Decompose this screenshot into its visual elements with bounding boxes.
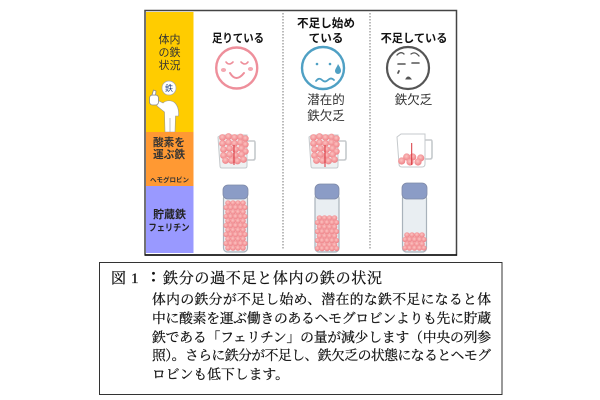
jar: low, short — [402, 183, 427, 252]
mug: full, sufficient — [218, 133, 255, 168]
heading: starting to be short: ている — [309, 32, 343, 45]
row header: oxygen carrying iron: 運ぶ鉄 — [153, 148, 185, 161]
row header: stored iron: 貯蔵鉄 — [153, 207, 186, 221]
column 3: short — [381, 32, 447, 107]
icon: smiling face — [216, 48, 257, 88]
row header: iron status in the body — [146, 12, 194, 132]
row header: oxygen carrying iron — [146, 132, 194, 186]
caption body: 体内の鉄分が不足し始め、潜在的な鉄不足になると体 — [152, 291, 491, 307]
column 2: starting to be short — [297, 16, 355, 123]
jar: reduced, starting to be short — [315, 184, 339, 252]
chart frame — [145, 10, 457, 255]
label: iron status: 体内 — [158, 32, 180, 46]
jar: full, sufficient — [223, 185, 248, 252]
caption body: ロビンも低下します。 — [152, 367, 289, 382]
caption body: 照）。さらに鉄分が不足し、鉄欠乏の状態になるとヘモグ — [152, 347, 491, 363]
row header: stored iron: フェリチン — [148, 223, 190, 234]
icon: worried face — [302, 47, 344, 89]
row header: oxygen carrying iron: ヘモグロビン — [150, 175, 190, 184]
label: latent iron deficiency: 鉄欠乏 — [307, 108, 345, 123]
caption box — [100, 262, 502, 394]
caption title: 鉄分の過不足と体内の鉄の状況 — [163, 270, 382, 287]
icon: unwell face — [387, 47, 429, 89]
label: iron status: 状況 — [158, 58, 180, 72]
label: latent iron deficiency: 潜在的 — [307, 92, 345, 107]
row header: stored iron — [146, 186, 194, 253]
caption title: 1 — [131, 271, 138, 287]
heading: short: 不足している — [381, 32, 447, 45]
caption title: 図 — [111, 270, 126, 287]
heading: starting to be short: 不足し始め — [297, 16, 355, 30]
caption body: 中に酸素を運ぶ働きのあるヘモグロビンよりも先に貯蔵 — [152, 310, 491, 326]
caption body: 鉄である「フェリチン」の量が減少します（中央の列参 — [152, 329, 491, 345]
label: iron status: の鉄 — [158, 45, 180, 59]
row header: oxygen carrying iron: 酸素を — [153, 136, 185, 149]
icon: person with thumb up — [150, 81, 179, 132]
caption title: ： — [146, 270, 161, 286]
icon: person with thumb up: 鉄 — [165, 83, 173, 93]
mug: full, starting to be short — [309, 133, 346, 168]
caption body — [152, 291, 491, 382]
column 1: sufficient — [212, 32, 264, 88]
mug: low, short — [397, 134, 432, 167]
label: iron deficiency: 鉄欠乏 — [395, 92, 433, 107]
heading: sufficient: 足りている — [212, 32, 264, 45]
